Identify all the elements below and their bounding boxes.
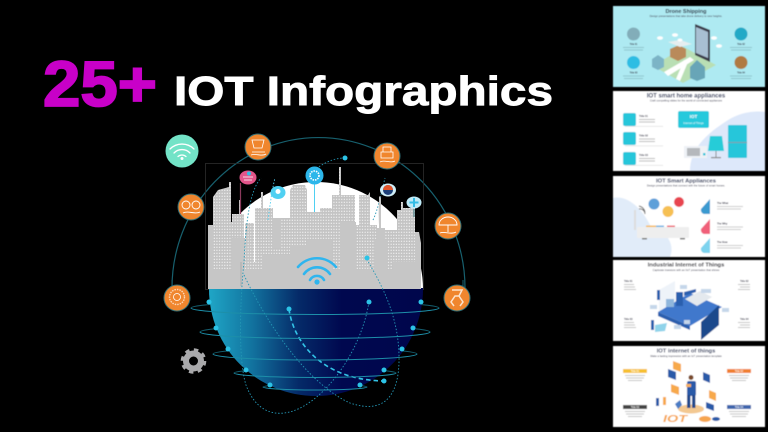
wifi symbol on city	[298, 258, 336, 285]
lamp	[708, 136, 724, 158]
icon: red gauge node	[379, 184, 396, 232]
icon: brain chip badge	[164, 280, 190, 311]
industrial labels: Title 02	[740, 280, 749, 283]
drone item circles: Title 01	[630, 43, 638, 46]
thumbnail subtitle: Make a lasting impression with an IoT presentation template	[650, 354, 722, 358]
router background blob	[613, 197, 672, 257]
industrial labels	[624, 280, 750, 328]
thick dashed connection	[289, 309, 384, 381]
thumbnail heading: Drone Shipping	[666, 9, 706, 15]
home appliance items: Title 01	[639, 114, 648, 118]
color label bars: Title 02	[735, 370, 744, 373]
large orbit arc	[172, 138, 465, 288]
thumbnail heading: Industrial Internet of Things	[648, 262, 724, 268]
color label bars: Title 03	[631, 406, 640, 409]
fridge	[728, 125, 747, 158]
drone item circles	[623, 28, 752, 79]
thumbnail: Industrial Internet of Things	[613, 260, 765, 341]
thumbnail: IOT internet of things	[613, 346, 765, 427]
thumbnail heading: IOT Smart Appliances	[656, 178, 716, 184]
thumbnail: Drone Shipping	[613, 6, 765, 87]
drone item circles: Title 02	[737, 43, 746, 46]
thumbnail subtitle: Design presentations that connect with the future of smart homes.	[647, 184, 725, 188]
drone item circles: Title 04	[737, 72, 746, 74]
industrial labels: Title 03	[624, 318, 633, 321]
home appliance items	[623, 113, 663, 166]
illustration: IoT globe with city	[164, 134, 470, 413]
icon: blue plus node	[406, 196, 422, 217]
what why how items: The How	[717, 241, 727, 244]
icon: robot arm badge	[444, 280, 470, 311]
title	[43, 48, 553, 120]
icon: umbrella badge	[435, 213, 461, 239]
thumbnail heading: IOT internet of things	[657, 348, 715, 354]
drone item circles: Title 03	[630, 72, 638, 74]
globe lower gradient half	[209, 288, 423, 396]
thumbnail: IOT Smart Appliances	[613, 176, 765, 257]
icon: shopping cart badge	[245, 134, 271, 160]
color label bars: Title 04	[735, 406, 744, 409]
thumbnail subtitle: Design presentations that take drone delivery to new heights.	[650, 14, 723, 18]
icon: blue gear node	[306, 166, 324, 212]
icon: gears badge	[178, 194, 204, 220]
icon: pink map pin	[240, 170, 256, 214]
globe upper white half	[241, 182, 423, 288]
icon: gray gear	[182, 350, 205, 372]
orbit rings back halves	[191, 302, 439, 387]
IOT label box: IOT	[690, 114, 698, 119]
dotted network curves	[240, 158, 399, 413]
icon: wifi badge	[166, 134, 198, 168]
network nodes	[206, 156, 424, 388]
person with floating icons	[656, 361, 716, 414]
drone city illustration	[652, 24, 722, 83]
what why how items	[701, 199, 743, 253]
what why how items: The What	[717, 202, 728, 205]
home appliance items: Title 02	[639, 134, 648, 138]
orbit rings front halves	[191, 308, 439, 390]
appliance bubbles	[648, 197, 684, 217]
icon: delivery boxes badge	[374, 143, 400, 169]
factory illustration	[650, 281, 729, 340]
smart home background blob	[690, 111, 765, 171]
title number: 25+: 25+	[43, 48, 157, 120]
industrial labels: Title 01	[624, 280, 633, 283]
thumbnail subtitle: Captivate investors with an IIoT presentation that shines	[653, 268, 720, 272]
bottom gadgets	[699, 416, 720, 422]
color label bars	[623, 369, 751, 417]
industrial labels: Title 04	[740, 318, 749, 321]
thumbnail: IOT smart home appliances	[613, 91, 765, 171]
title text: IOT Infographics: IOT Infographics	[174, 68, 553, 114]
router	[634, 206, 689, 240]
IOT label box	[678, 111, 709, 128]
color label bars: Title 01	[631, 370, 640, 373]
thumbnail heading: IOT smart home appliances	[647, 94, 726, 100]
IOT orange isometric lettering: IOT	[663, 414, 688, 425]
what why how items: The Why	[717, 222, 728, 226]
home appliance items: Title 03	[639, 153, 648, 157]
icon: location pin	[270, 186, 286, 199]
city skyline	[208, 167, 421, 289]
microwave	[684, 146, 707, 158]
IOT label box: Internet of Things	[683, 121, 704, 125]
city frame	[206, 164, 424, 290]
thumbnail subtitle: Craft compelling slides for the world of connected appliances	[650, 98, 723, 102]
